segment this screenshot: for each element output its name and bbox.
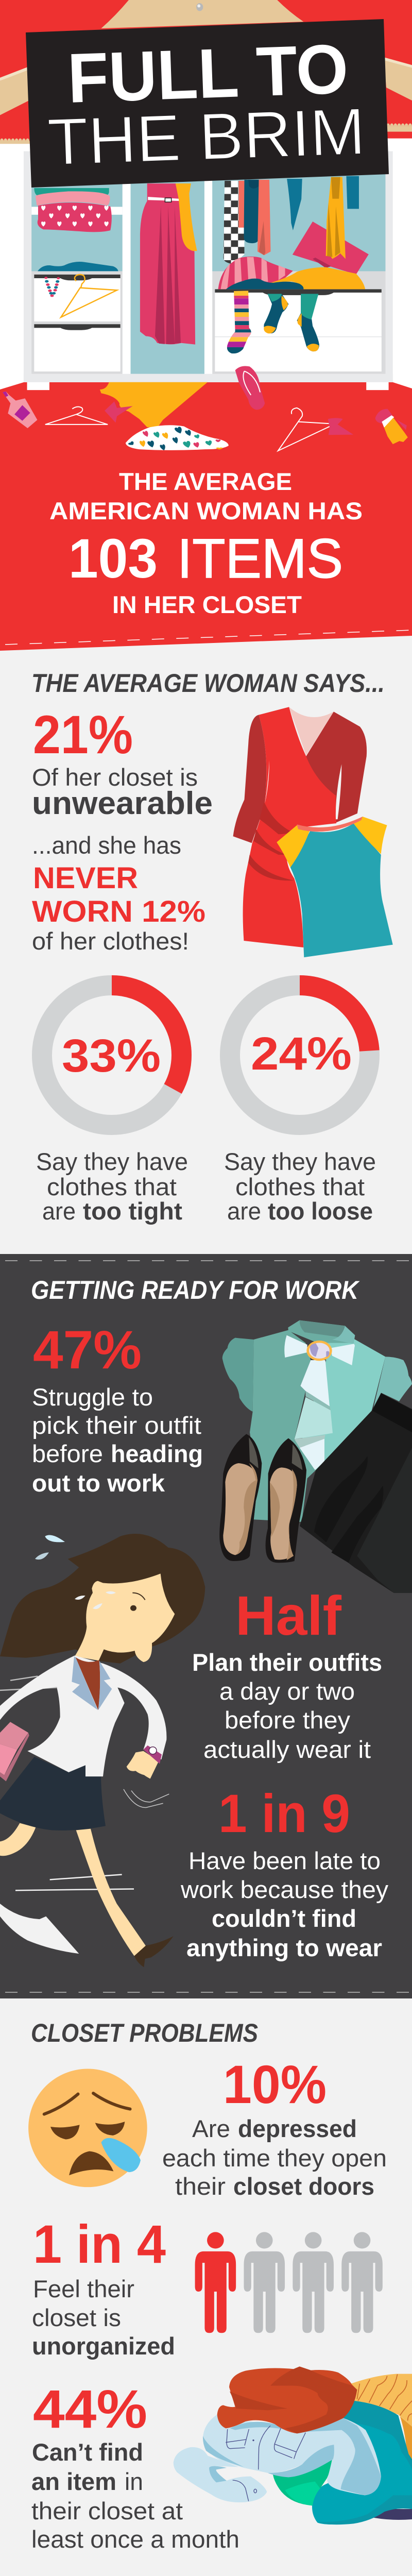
caption: too loose: Say they have (224, 1148, 376, 1175)
stat: 44%: their closet at (31, 2497, 183, 2524)
panel: getting ready for work (0, 1254, 412, 1998)
hanger on drawer (61, 275, 117, 317)
stat: 1 in 9: couldn’t find (212, 1905, 356, 1932)
caption: too loose: clothes that (235, 1173, 365, 1200)
red floor (0, 382, 412, 515)
stat: 10%: depressed (238, 2115, 357, 2142)
stat: never worn 12%: of her clothes! (32, 927, 189, 955)
blouse (0, 1655, 166, 1776)
clothes pile (218, 257, 293, 289)
stat: 1 in 9 (180, 1784, 389, 1961)
stat: 47% (32, 1320, 203, 1497)
stat: 21% unwearable: 21% (33, 705, 133, 765)
title banner (26, 19, 389, 188)
panel: the average woman says (31, 669, 393, 1225)
caption: too tight (36, 1148, 188, 1225)
legs (0, 1823, 36, 1856)
illustration: hanger behind title (0, 0, 412, 147)
socks (227, 291, 251, 353)
hair (0, 1534, 205, 1664)
text block: 103 items headline: AMERICAN WOMAN HAS (49, 497, 363, 524)
skirt (0, 1757, 106, 1831)
icon: sad face (28, 2069, 147, 2187)
caption: too loose: are (227, 1197, 261, 1225)
stat: 1 in 4 (32, 2214, 175, 2360)
right shoe (266, 1438, 306, 1563)
text block: 103 items headline (49, 468, 363, 618)
caption: too loose: too loose (268, 1197, 373, 1225)
stat: 44%: Can’t find (32, 2438, 143, 2466)
illustration: woman running late (0, 1534, 205, 1967)
stat: never worn 12%: NEVER (33, 861, 138, 895)
icon: four people, one highlighted (195, 2232, 383, 2333)
stat: 10%: 10% (223, 2055, 327, 2115)
panel: closet problems (28, 2019, 412, 2553)
stat: 10%: Are (192, 2115, 230, 2142)
caption: too tight: too tight (83, 1197, 182, 1225)
donut chart: 24% too loose: 24% (251, 1028, 352, 1080)
stat: 21% unwearable: unwearable (32, 786, 213, 821)
stat: 44%: 44% (33, 2379, 147, 2439)
stat: half: Half (235, 1584, 342, 1647)
stat: 10%: closet doors (233, 2173, 374, 2200)
stat: half: before they (225, 1706, 351, 1734)
hanging clothes (224, 181, 244, 264)
right drawers (215, 289, 382, 336)
stat: 44%: least once a month (31, 2526, 239, 2553)
closet feet (27, 382, 49, 390)
stat: 1 in 9: anything to wear (186, 1934, 382, 1961)
title line: FULL TO: FULL TO (66, 29, 350, 117)
panel: header (0, 0, 412, 651)
heading: THE AVERAGE WOMAN SAYS... (31, 669, 385, 698)
left drawers (34, 275, 121, 321)
stat: 1 in 4: unorganized (32, 2332, 175, 2360)
folded clothes (34, 188, 109, 196)
stat: 44% (31, 2379, 239, 2553)
caption: too tight: Say they have (36, 1148, 188, 1175)
stat: half: actually wear it (203, 1736, 371, 1763)
illustration: overflowing closet (0, 139, 412, 391)
stat: 21% unwearable: Of her closet is (32, 764, 198, 791)
stat: 10% (162, 2055, 387, 2200)
stat: 47%: out to work (32, 1469, 165, 1497)
stat: 10%: each time they open (162, 2144, 387, 2172)
donut chart: 24% too loose (230, 985, 370, 1125)
heading: CLOSET PROBLEMS (31, 2019, 258, 2047)
face (75, 1573, 175, 1662)
stat: 47%: heading (111, 1440, 203, 1467)
illustration: red dress and teal top (233, 707, 393, 957)
caption: too tight: clothes that (47, 1173, 177, 1200)
stat: half (192, 1584, 382, 1763)
sweat drops (45, 1535, 65, 1542)
stat: 1 in 9: work because they (180, 1876, 389, 1903)
stat: 47%: 47% (33, 1320, 142, 1380)
skirt (300, 1393, 412, 1593)
stat: 1 in 4: closet is (32, 2304, 121, 2331)
stat: 1 in 9: Have been late to (188, 1847, 381, 1874)
text block: 103 items headline: IN HER CLOSET (112, 591, 302, 618)
caption: too tight: are (42, 1197, 76, 1225)
stat: never worn 12%: WORN 12% (32, 895, 205, 928)
stat: 44%: an item (31, 2468, 116, 2495)
text block: 103 items headline: 103 (68, 527, 158, 589)
illustration: items on the floor (3, 366, 408, 451)
stat: 21% unwearable (32, 705, 213, 821)
stat: 44%: in (125, 2468, 143, 2495)
speed lines (15, 1874, 134, 1890)
pink dress (140, 183, 195, 345)
donut chart: 33% too tight (42, 985, 181, 1125)
yellow scarf (176, 183, 197, 251)
heading: GETTING READY FOR WORK (31, 1276, 360, 1304)
stat: 1 in 4: Feel their (33, 2275, 134, 2302)
stat: never worn 12%: ...and she has (32, 832, 181, 859)
stat: 47%: Struggle to (32, 1383, 153, 1411)
text block: 103 items headline: THE AVERAGE (119, 468, 292, 495)
necklace (44, 277, 60, 297)
stat: 1 in 4: 1 in 4 (33, 2214, 166, 2275)
stat: half: Plan their outfits (192, 1649, 382, 1676)
title line: THE BRIM: THE BRIM (46, 95, 367, 179)
book (0, 1722, 28, 1750)
caption: too loose (224, 1148, 376, 1225)
left shoe (219, 1434, 262, 1561)
stat: 47%: before (32, 1440, 103, 1467)
text block: 103 items headline: ITEMS (177, 527, 343, 589)
illustration: pile of clothes (174, 2366, 412, 2524)
stat: 47%: pick their outfit (32, 1412, 201, 1439)
stat: 10%: their (175, 2173, 226, 2200)
stat: 1 in 9: 1 in 9 (218, 1784, 350, 1844)
stat: half: a day or two (219, 1677, 355, 1705)
stat: never worn 12% (32, 832, 205, 955)
hand and watch (127, 1751, 159, 1779)
illustration: work outfit and shoes (219, 1320, 412, 1593)
donut chart: 33% too tight: 33% (62, 1030, 161, 1082)
